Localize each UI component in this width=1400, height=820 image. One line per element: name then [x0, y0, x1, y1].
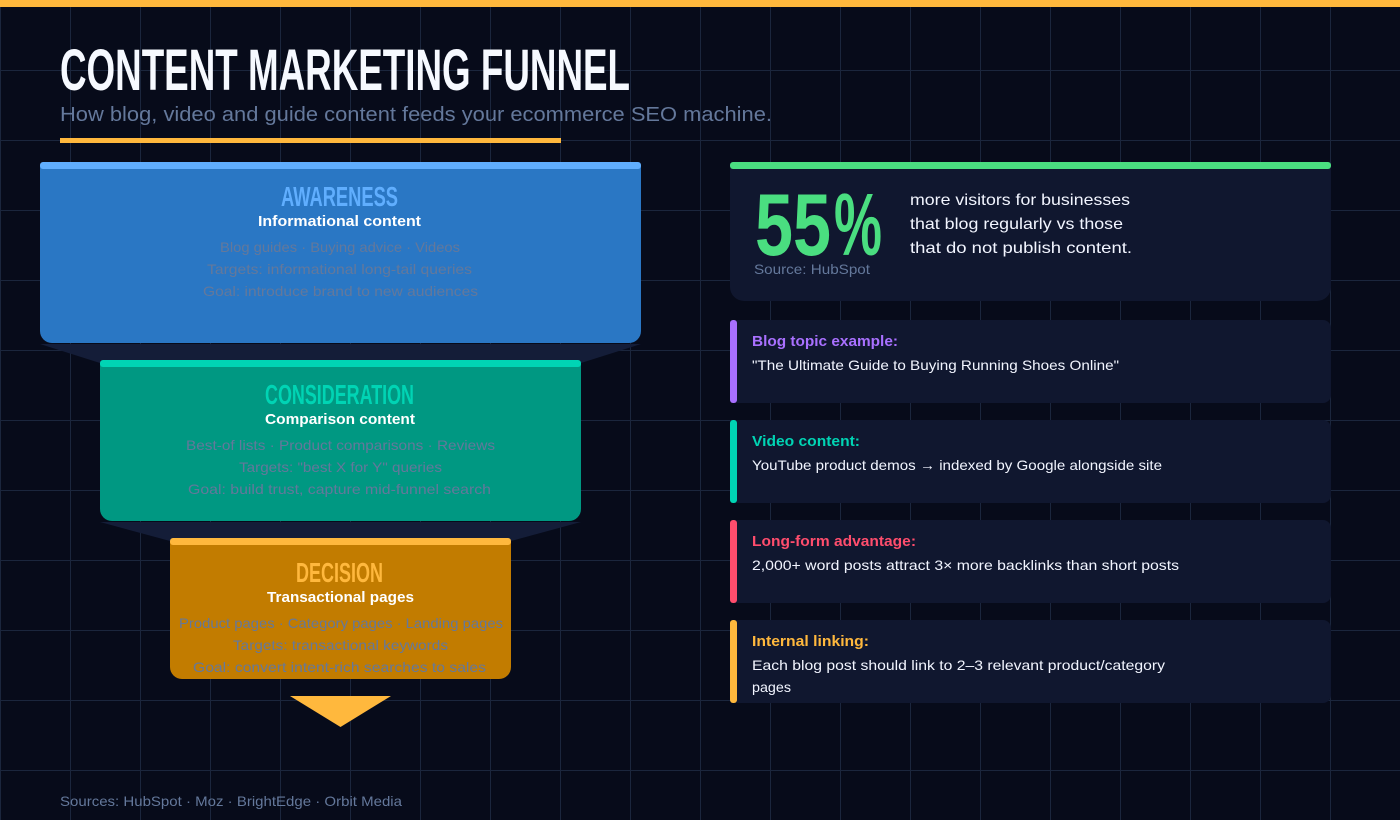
panel: consideration	[100, 360, 581, 521]
details: decision: Product pages · Category pages · Landing pages	[179, 615, 503, 631]
card: internal linking: pages	[752, 679, 791, 695]
title: CONTENT MARKETING FUNNEL	[60, 38, 630, 103]
details: awareness: Blog guides · Buying advice · Videos	[220, 239, 460, 255]
card: long-form advantage	[730, 520, 1331, 603]
statistic description	[910, 192, 1132, 257]
details: consideration: Goal: build trust, capture mid-funnel search	[188, 481, 491, 497]
statistic description: that do not publish content.	[910, 240, 1132, 257]
details: consideration: Targets: "best X for Y" queries	[239, 459, 442, 475]
details: awareness: Goal: introduce brand to new audiences	[203, 283, 478, 299]
details: awareness	[203, 239, 478, 299]
subheading: transactional pages: Transactional pages	[267, 589, 414, 606]
statistic: 55%: 55	[755, 175, 831, 274]
heading: consideration: CONSIDERATION	[265, 379, 414, 410]
details: decision: Targets: transactional keywords	[233, 637, 448, 653]
subheading: comparison content: Comparison content	[265, 411, 415, 428]
card: long-form advantage: 2,000+ word posts attract 3× more backlinks than short posts	[752, 557, 1179, 573]
statistic description: that blog regularly vs those	[910, 216, 1123, 233]
card: blog topic example: "The Ultimate Guide to Buying Running Shoes Online"	[752, 357, 1119, 373]
statistic: 55%: %	[834, 175, 882, 274]
card: video content	[730, 420, 1331, 503]
card: video content: Video content:	[752, 433, 860, 450]
connector: awareness to consideration	[40, 344, 641, 363]
connector: consideration to decision	[100, 522, 581, 541]
details: decision	[179, 615, 503, 675]
details: consideration: Best-of lists · Product comparisons · Reviews	[186, 437, 495, 453]
title underline	[60, 138, 561, 143]
card: video content: YouTube product demos → indexed by Google alongside site	[752, 457, 1162, 473]
funnel	[40, 162, 641, 727]
top accent bar	[0, 0, 1400, 7]
card: internal linking: Internal linking:	[752, 633, 869, 650]
details: decision: Goal: convert intent-rich searches to sales	[193, 659, 486, 675]
details: awareness: Targets: informational long-tail queries	[207, 261, 472, 277]
statistic description: more visitors for businesses	[910, 192, 1130, 209]
subheading: informational content: Informational content	[258, 213, 421, 230]
card: internal linking: Each blog post should link to 2–3 relevant product/category	[752, 657, 1165, 673]
panel: key statistic	[730, 162, 1331, 301]
subtitle: How blog, video and guide content feeds your ecommerce SEO machine.	[60, 104, 772, 126]
source: hubspot: Source: HubSpot	[754, 261, 870, 277]
heading: decision: DECISION	[296, 557, 383, 588]
panel: decision	[170, 538, 511, 679]
footer sources: Sources: HubSpot · Moz · BrightEdge · Orbit Media	[60, 793, 402, 809]
arrow: funnel output	[290, 696, 391, 727]
card: blog topic example	[730, 320, 1331, 403]
card: long-form advantage: Long-form advantage:	[752, 533, 916, 550]
details: consideration	[186, 437, 495, 497]
card: internal linking	[730, 620, 1331, 703]
panel: awareness	[40, 162, 641, 343]
card: blog topic example: Blog topic example:	[752, 333, 898, 350]
heading: awareness: AWARENESS	[281, 181, 398, 212]
